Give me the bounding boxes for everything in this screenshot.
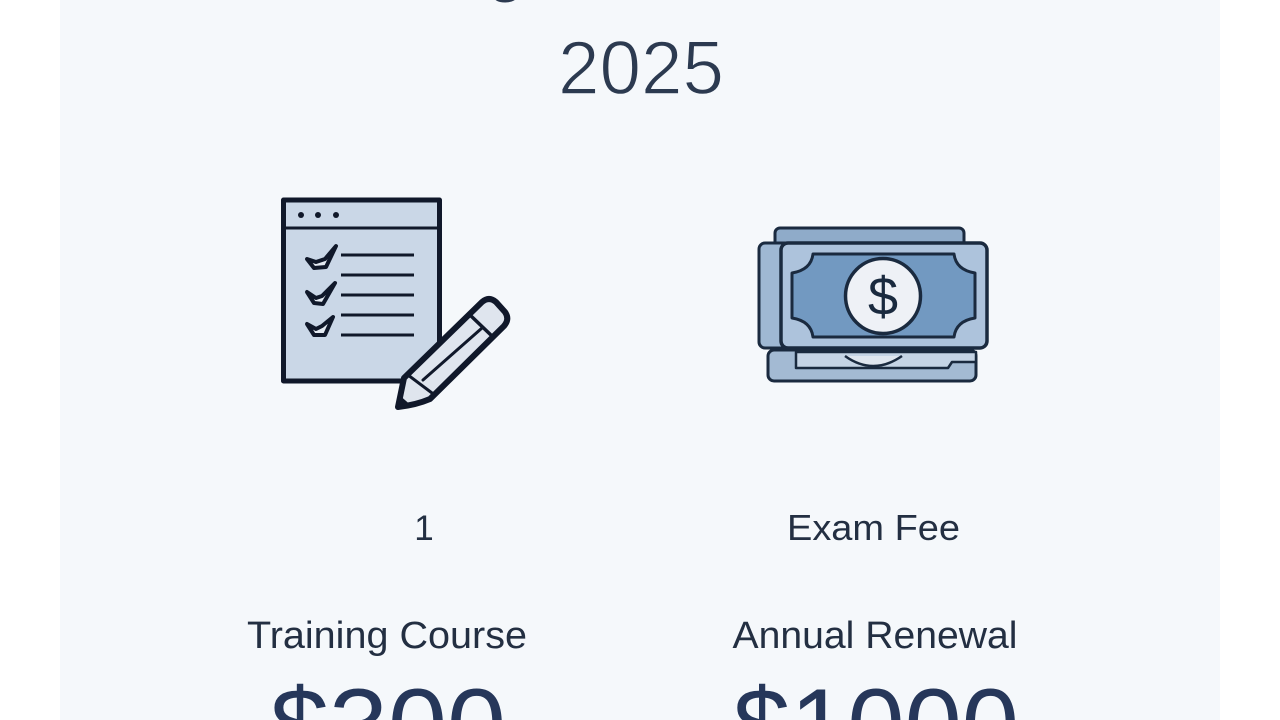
dollar sign: $	[868, 267, 898, 327]
label: training course: Training Course	[247, 615, 527, 657]
label: annual renewal: Annual Renewal	[732, 615, 1018, 657]
checklist page	[284, 200, 440, 381]
label: item number: 1	[414, 509, 434, 548]
icon: stack of banknotes	[759, 228, 987, 381]
label: exam fee: Exam Fee	[787, 507, 960, 548]
left bill	[759, 243, 799, 348]
back bill	[775, 228, 964, 268]
heading: year: 2025	[558, 26, 724, 111]
pencil	[398, 299, 507, 407]
bottom stack	[768, 350, 976, 381]
icon: checklist with pencil	[284, 200, 507, 407]
front bill	[781, 243, 987, 348]
